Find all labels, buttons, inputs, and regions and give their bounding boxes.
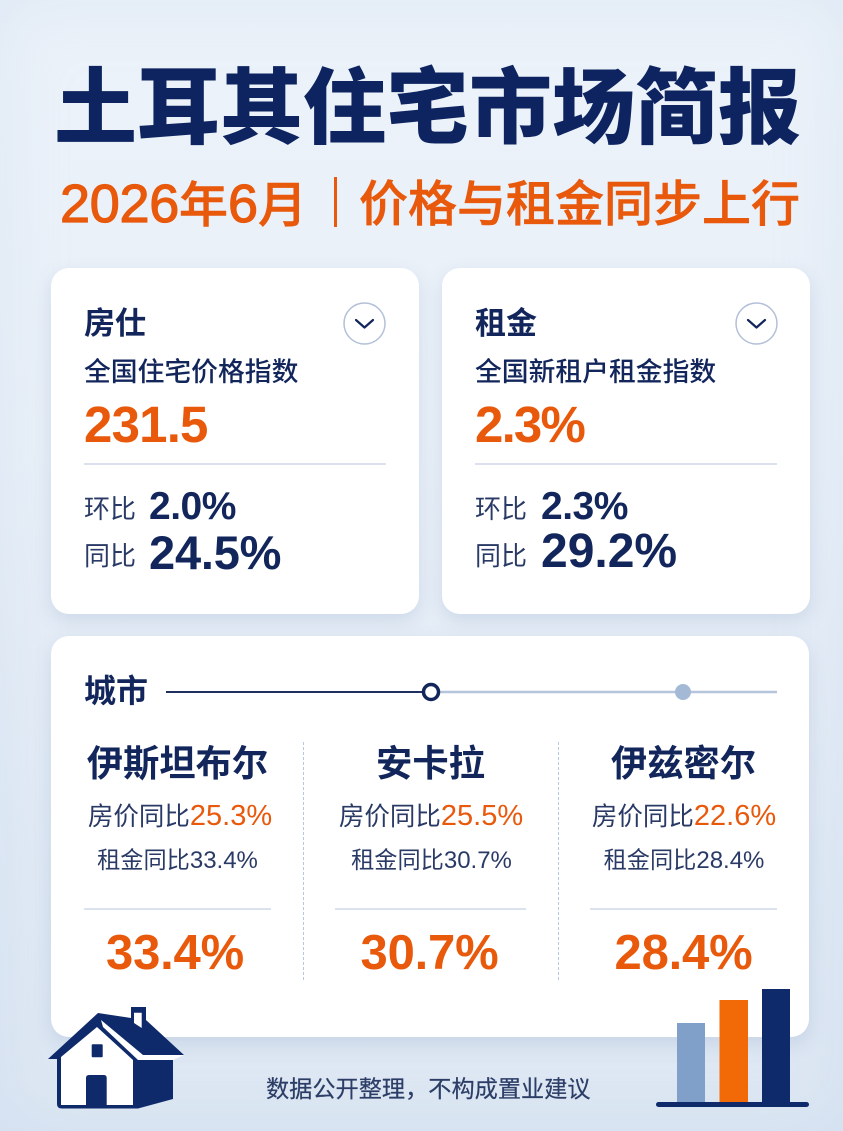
rent change: 租金同比30.7%: [351, 847, 512, 874]
heading: rents: 租金: [475, 306, 537, 341]
label: 环比: [475, 494, 527, 524]
city: Ankara: [335, 743, 526, 980]
label: 同比: [475, 541, 527, 571]
stat: year on year: [475, 525, 677, 578]
big value: 30.7%: [361, 926, 498, 980]
city: Izmir: [590, 743, 777, 980]
stat: year on year: [84, 526, 281, 579]
timeline: [166, 682, 777, 702]
big value: 28.4%: [615, 926, 752, 980]
heading: house prices: 房仕: [84, 306, 146, 341]
value: 29.2%: [541, 525, 677, 578]
value: 2.3%: [541, 485, 628, 528]
subheading: national house price index: 全国住宅价格指数: [84, 357, 298, 387]
panel: house prices: [51, 268, 419, 614]
house price change: 房价同比22.6%: [592, 800, 776, 832]
icon: chevron: [343, 302, 386, 345]
icon: chevron: [735, 302, 778, 345]
panel: cities: [51, 636, 809, 1037]
stat: month on month: [84, 485, 236, 528]
value: 2.0%: [149, 485, 236, 528]
label: 同比: [84, 541, 136, 571]
big value: 33.4%: [106, 926, 244, 980]
label: 环比: [84, 494, 136, 524]
house price change: 房价同比25.3%: [88, 800, 272, 832]
value: 24.5%: [149, 526, 281, 579]
subtitle: headline: 价格与租金同步上行: [359, 178, 800, 232]
rent change: 租金同比28.4%: [604, 847, 764, 874]
rent change: 租金同比33.4%: [97, 847, 258, 874]
stat: month on month: [475, 485, 628, 528]
panel: rents: [442, 268, 810, 614]
title: 土耳其住宅市场简报: [54, 62, 801, 155]
subtitle: divider: [334, 177, 337, 227]
value: index: 231.5: [84, 396, 208, 453]
heading: cities: 城市: [84, 673, 148, 709]
city: Istanbul: [84, 743, 272, 980]
value: rent index: 2.3%: [475, 396, 584, 453]
subtitle: date: 2026年6月: [60, 174, 307, 234]
icon: bar chart: [656, 989, 809, 1107]
house price change: 房价同比25.5%: [339, 800, 523, 832]
subheading: national new tenant rent index: 全国新租户租金指数: [475, 357, 716, 387]
city name: 伊斯坦布尔: [87, 743, 268, 784]
city name: 伊兹密尔: [611, 743, 756, 784]
city name: 安卡拉: [376, 743, 485, 784]
icon: house: [48, 1007, 184, 1108]
footer note: 数据公开整理，不构成置业建议: [266, 1076, 591, 1102]
